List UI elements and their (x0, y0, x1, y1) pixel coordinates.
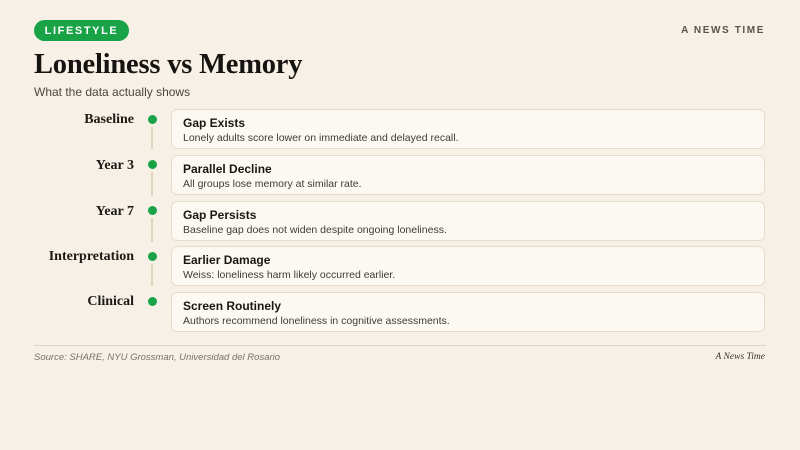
category pill (34, 20, 129, 41)
timeline (49, 109, 765, 332)
row: Interpretation: Earlier Damage (183, 253, 270, 267)
row: Clinical: Clinical (87, 294, 134, 309)
row: Clinical: Authors recommend loneliness in cognitive assessments. (183, 315, 450, 327)
row: Clinical: Screen Routinely (183, 299, 281, 313)
row: Interpretation: Interpretation (49, 249, 134, 264)
row: Baseline: Baseline (84, 112, 134, 127)
row: Interpretation: Weiss: loneliness harm likely occurred earlier. (183, 269, 395, 281)
row: Year 3: All groups lose memory at similar rate. (183, 178, 362, 190)
row: Interpretation (49, 246, 765, 286)
title: Loneliness vs Memory (34, 49, 302, 80)
subtitle: What the data actually shows (34, 85, 190, 99)
row: Year 7 (96, 201, 765, 242)
row: Baseline: Gap Exists (183, 116, 245, 130)
row: Year 7: Baseline gap does not widen despite ongoing loneliness. (183, 224, 447, 236)
row: Year 7: Year 7 (96, 204, 134, 219)
row: Baseline: Lonely adults score lower on immediate and delayed recall. (183, 132, 458, 144)
brand: A NEWS TIME (681, 25, 765, 36)
row: Year 3: Year 3 (96, 158, 134, 173)
row: Clinical (87, 292, 765, 332)
signature: A News Time (716, 352, 765, 362)
row: Baseline (84, 109, 765, 149)
row: Year 3: Parallel Decline (183, 162, 272, 176)
category pill: LIFESTYLE (45, 25, 118, 37)
row: Year 3 (96, 155, 765, 196)
source: Source: SHARE, NYU Grossman, Universidad del Rosario (34, 352, 280, 363)
row: Year 7: Gap Persists (183, 208, 256, 222)
